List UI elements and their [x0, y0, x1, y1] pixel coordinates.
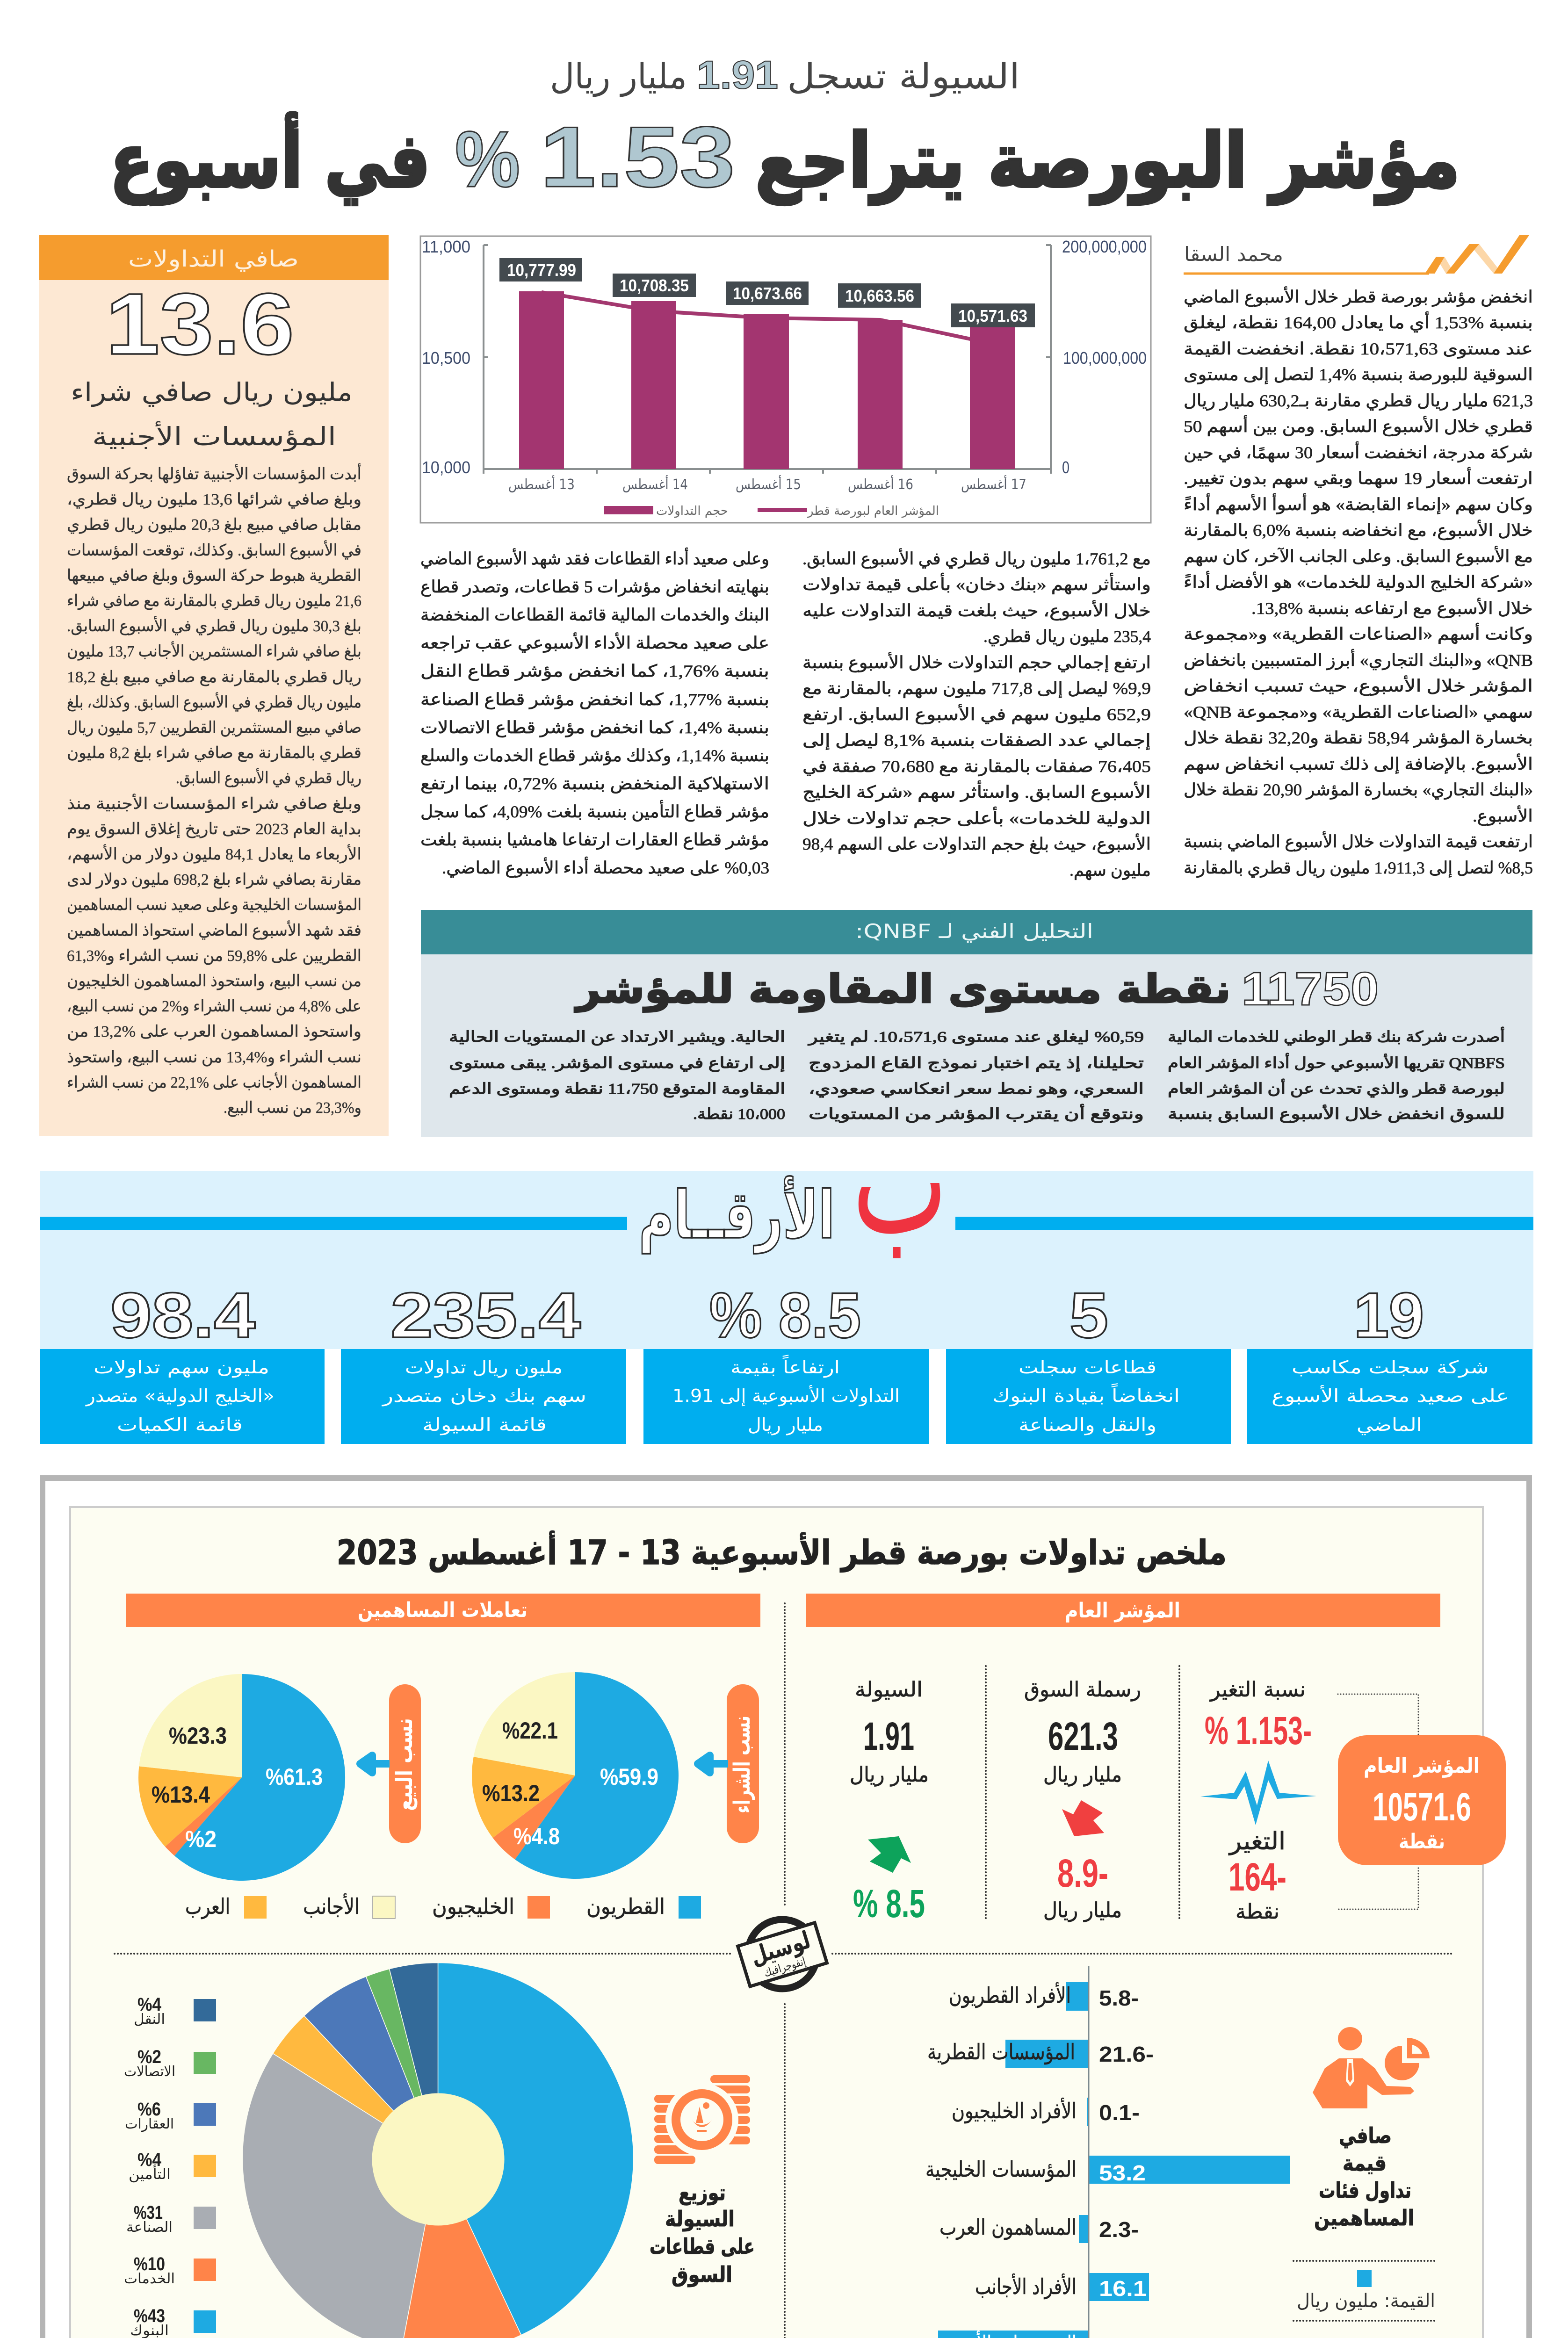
donut legend: %6: [137, 2099, 161, 2120]
stamp: Lusail infographic: لوسيل: [747, 1926, 814, 1970]
data labels: [499, 258, 1035, 327]
text column: right: وكانت أسهم «الصناعات القطرية» و«مجموعة: [1184, 623, 1533, 644]
bar chart caption: المساهمين: [1314, 2205, 1414, 2230]
stat: 98.4: 98.4: [110, 1280, 255, 1351]
stat: 8.5%: ارتفاعاً بقيمة: [730, 1355, 840, 1378]
text column: right: الأسبوع.: [1473, 805, 1533, 826]
bar row values: [1099, 1986, 1154, 2338]
panel subheading: مليون ريال صافي شراء: [71, 377, 353, 407]
stat: liquidity: مليار ريال: [850, 1763, 929, 1787]
bar row values: 16.1: [1099, 2276, 1147, 2301]
analysis column 1: للسوق انخفض خلال الأسبوع السابق بنسبة: [1168, 1104, 1505, 1123]
donut legend: الخدمات: [124, 2271, 175, 2287]
panel body text: مقابل صافي مبيع بلغ 20,3 مليون ريال قطري: [67, 516, 361, 534]
analysis column 3: إلى ارتفاع في مستوى المؤشر. يبقى مستوى: [449, 1054, 785, 1072]
text column: right: 621,3 مليار ريال قطري مقارنة بـ630,2 مليار ريال: [1184, 391, 1533, 411]
pie: buy ratios: %13.2: [482, 1780, 540, 1806]
stat: 19: [1247, 1280, 1532, 1444]
stat: 8.5%: [643, 1280, 929, 1444]
subtitle: السيولة تسجل: [787, 56, 1020, 97]
panel body text: فقد شهد الأسبوع الماضي استحواذ المساهمين: [67, 920, 361, 940]
stat: market cap: مليار ريال: [1043, 1898, 1122, 1922]
date labels: 15 أغسطس: [736, 475, 801, 493]
pie legend: القطريون: [586, 1894, 665, 1919]
panel body text: و%23,3 من نسب البيع.: [224, 1099, 361, 1117]
text column: middle: إجمالي عدد الصفقات بنسبة %8,1 ليصل إلى: [802, 731, 1151, 750]
icon: zigzag: [1425, 235, 1529, 274]
panel body text: وبلغ صافي شراء المؤسسات الأجنبية منذ: [67, 794, 361, 813]
panel: QNBF technical analysis: [421, 910, 1532, 1137]
text column: left: بنسبة %1,77، كما انخفض مؤشر قطاع الصناعة: [420, 690, 769, 709]
stat: change: -1.153 %: [1205, 1709, 1312, 1753]
panel body text: قطري بالمقارنة مع صافي شراء بلغ 8,2 مليون: [67, 744, 361, 762]
analysis column 1: QNBFS تقريها الأسبوعي حول أداء المؤشر العام: [1168, 1053, 1505, 1072]
donut legend: الاتصالات: [124, 2064, 175, 2080]
stat: 19: 19: [1354, 1280, 1424, 1351]
text column: left: بنسبة %1,76، كما انخفض مؤشر قطاع النقل: [420, 662, 769, 681]
analysis heading: 11750: [1242, 963, 1379, 1015]
panel: net trading: [39, 235, 389, 1136]
left axis labels: 10,500: [422, 348, 470, 368]
analysis column 2: %0,59 ليغلق عند مستوى 10،571,6. لم يتغير: [807, 1028, 1144, 1046]
author byline: محمد السقا: [1184, 243, 1283, 266]
stat: 19: شركة سجلت مكاسب: [1292, 1357, 1489, 1378]
stat: 235.4: قائمة السيولة: [422, 1414, 547, 1436]
text column: middle: مليون سهم.: [1069, 861, 1151, 880]
stat: 5: قطاعات سجلت: [1019, 1357, 1156, 1378]
stat: 19: على صعيد محصلة الأسبوع: [1272, 1385, 1509, 1407]
general index callout: المؤشر العام: [1364, 1754, 1480, 1778]
text column: left: بنسبة %1,4، كما انخفض مؤشر قطاع الاتصالات: [420, 718, 769, 737]
bar row values: -2.3: [1099, 2217, 1139, 2242]
text column: middle: واستأثر سهم «بنك دخان» بأعلى قيمة تداولات: [802, 573, 1151, 594]
big number 13.6: 13.6: [106, 276, 294, 373]
text column: right: بنسبة %1,53 أي ما يعادل 164,00 نقطة، ليغلق: [1184, 311, 1533, 332]
icon: up arrow: [868, 1836, 911, 1873]
left axis labels: 10,000: [422, 458, 470, 477]
stat: 8.5%: مليار ريال: [748, 1414, 823, 1435]
stat: change: [1200, 1678, 1316, 1924]
right axis labels: 0: [1062, 458, 1069, 477]
panel body text: نسب الشراء و%13,4 من نسب البيع، واستحوذ: [67, 1049, 361, 1067]
donut caption: على قطاعات: [650, 2234, 755, 2259]
stat: 5: انخفاضاً بقيادة البنوك: [992, 1383, 1180, 1407]
text column: middle: [802, 548, 1151, 880]
general index callout: 10571.6: [1373, 1785, 1471, 1829]
text column: middle: الدولية للخدمات» بأعلى حجم تداولات خلال: [802, 807, 1151, 828]
panel body text: على %4,8 من نسب الشراء و%2 من نسب البيع،: [67, 998, 361, 1016]
donut caption: [650, 2180, 755, 2287]
panel subheading: [71, 377, 353, 451]
stat: 8.5%: التداولات الأسبوعية إلى 1.91: [672, 1385, 900, 1407]
donut chart: liquidity by sector: [243, 1963, 633, 2338]
panel body text: القطريين على %59,8 من نسب الشراء و%61,3: [67, 947, 361, 965]
bars: [519, 291, 1015, 469]
stat: change: التغير: [1228, 1827, 1286, 1855]
donut legend: %4: [137, 1994, 162, 2015]
text column: middle: 652,9 مليون سهم في الأسبوع السابق. ارتفع: [802, 704, 1151, 724]
panel body text: القطرية هبوط حركة السوق وبلغ صافي مبيعها: [67, 567, 361, 585]
analysis column 3: المقاومة المتوقع 11،750 نقطة ومستوى الدعم: [449, 1080, 785, 1097]
text column: middle: مع 1،761,2 مليون ريال قطري في الأسبوع السابق.: [802, 548, 1151, 569]
pie: buy ratios: %4.8: [513, 1823, 560, 1849]
pie legend: العرب: [185, 1894, 230, 1919]
section header: shareholder dealings: تعاملات المساهمين: [358, 1598, 527, 1622]
donut caption: السوق: [672, 2262, 732, 2287]
stat: 235.4: [341, 1280, 626, 1444]
panel body text: أبدت المؤسسات الأجنبية تفاؤلها بحركة السوق: [67, 463, 361, 483]
stat: market cap: 621.3: [1048, 1714, 1118, 1758]
bar chart caption: قيمة: [1343, 2150, 1387, 2176]
panel header: صافي التداولات: [128, 246, 299, 272]
icon: down arrow: [1062, 1800, 1104, 1836]
text column: left: البنك والخدمات المالية قائمة القطاعات المنخفضة: [420, 606, 769, 625]
stat: 235.4: سهم بنك دخان متصدر: [381, 1385, 586, 1407]
line series: [542, 292, 992, 344]
donut legend: [124, 1994, 216, 2338]
subtitle: مليار ريال: [550, 56, 687, 97]
main title: [110, 108, 1460, 205]
donut legend: %31: [134, 2202, 163, 2223]
right axis labels: 200,000,000: [1062, 237, 1147, 256]
general index callout: [1338, 1735, 1506, 1865]
section header: general index: المؤشر العام: [1065, 1599, 1180, 1623]
panel body text: مقارنة بصافي شراء بلغ 698,2 مليون دولار لدى: [67, 871, 361, 889]
text column: middle: 76،405 صفقات بالمقارنة مع 70،680 صفقة في: [802, 757, 1151, 776]
text column: right: السوقية للبورصة بنسبة %1,4 لتصل إلى مستوى: [1184, 365, 1533, 384]
panel body text: المساهمون الأجانب على %22,1 من نسب الشراء: [67, 1072, 361, 1092]
panel: weekly summary frame: [43, 1478, 1529, 2338]
stat: 98.4: «الخليج الدولية» متصدر: [85, 1385, 275, 1407]
panel body text: ريال قطري في الأسبوع السابق.: [176, 768, 361, 787]
icon: coins with emblem: [654, 2075, 750, 2164]
text column: left: مؤشر قطاع العقارات ارتفاعا هامشيا بنسبة بلغت: [420, 830, 769, 850]
bar row values: -0.1: [1099, 2100, 1140, 2125]
data labels: 10,571.63: [958, 306, 1027, 325]
analysis column 1: [1168, 1027, 1505, 1123]
left axis labels: [422, 237, 470, 477]
text column: left: بنسبة %1,14، وكذلك مؤشر قطاع الخدمات والسلع: [420, 746, 769, 765]
pill: sell ratios label: نسب البيع: [391, 1718, 418, 1811]
panel body text: المؤسسات الخليجية وعلى صعيد نسب المساهمين: [67, 896, 361, 914]
bar row labels: المساهمون العرب: [939, 2215, 1077, 2240]
text column: right: «البنك التجاري» بخسارة المؤشر 20,90 نقطة خلال: [1184, 780, 1533, 800]
panel body text: ريال قطري بالمقارنة مع صافي مبيع بلغ 18,2: [67, 669, 361, 686]
summary title: ملخص تداولات بورصة قطر الأسبوعية 13 - 17 أغسطس 2023: [337, 1530, 1227, 1573]
stat: market cap: رسملة السوق: [1024, 1678, 1141, 1702]
section header: general index: [806, 1594, 1440, 1627]
panel body text: 21,6 مليون ريال قطري بالمقارنة مع صافي شراء: [67, 592, 361, 610]
pill: sell ratios label: [389, 1684, 421, 1843]
panel body text: في الأسبوع السابق. وكذلك، توقعت المؤسسات: [67, 540, 361, 560]
date labels: 14 أغسطس: [622, 475, 688, 493]
text column: right: بخسارة المؤشر 58,94 نقطة و32,20 نقطة خلال: [1184, 729, 1533, 748]
icon: businessman with pie chart: [1313, 2027, 1430, 2108]
panel body text: واستحوذ المساهمون العرب على %13,2 من: [67, 1023, 361, 1041]
analysis column 2: تحليلنا، إذ يتم اختبار نموذج القاع المزدوج: [809, 1054, 1144, 1072]
subtitle: [550, 53, 1020, 97]
left axis labels: 11,000: [422, 237, 470, 256]
data labels: 10,708.35: [620, 276, 689, 295]
pie: sell ratios: %61.3: [266, 1764, 323, 1790]
date labels: 13 أغسطس: [508, 475, 575, 493]
text column: right: الأسبوع. بالإضافة إلى ذلك تسبب انخفاض سهم: [1184, 753, 1533, 774]
text column: middle: ارتفع إجمالي حجم التداولات خلال الأسبوع بنسبة: [802, 652, 1151, 672]
text column: right: انخفض مؤشر بورصة قطر خلال الأسبوع الماضي: [1184, 286, 1533, 307]
panel body text: [67, 463, 361, 1117]
analysis column 1: لبورصة قطر والذي تحدث عن أن المؤشر العام: [1168, 1079, 1505, 1097]
bar chart caption: صافي: [1339, 2123, 1392, 2148]
panel body text: بداية العام 2023 حتى تاريخ إغلاق السوق يوم: [67, 821, 361, 838]
analysis header: التحليل الفني لـ QNBF:: [855, 920, 1093, 943]
panel body text: من نسب البيع، واستحوذ المساهمون الخليجيون: [67, 973, 361, 990]
text column: right: عند مستوى 10،571,63 نقطة. انخفضت القيمة: [1184, 339, 1533, 359]
chart legend: [604, 504, 939, 518]
text column: left: على صعيد محصلة الأداء الأسبوعي عقب تراجعه: [420, 632, 769, 653]
pie: buy ratios: [472, 1672, 679, 1879]
bar row labels: [925, 1982, 1077, 2338]
author byline: [1184, 235, 1529, 274]
subtitle: 1.91: [697, 53, 778, 97]
text column: right: مع الأسبوع السابق. وعلى الجانب الآخر، كان سهم: [1184, 546, 1533, 566]
panel header: [39, 235, 389, 280]
pie: sell ratios: %13.4: [152, 1782, 210, 1808]
numbers heading: [639, 1093, 948, 1268]
stat: market cap: [1024, 1678, 1141, 1922]
pill: buy ratios label: نسب الشراء: [729, 1716, 755, 1813]
analysis column 2: السعري، وهو نمط سعر انعكاسي صعودي،: [809, 1080, 1144, 1097]
arrow: sell: [360, 1755, 390, 1773]
data labels: 10,673.66: [733, 284, 802, 303]
stat: 8.5%: % 8.5: [709, 1280, 861, 1351]
bar row labels: المؤسسات القطرية: [927, 2039, 1075, 2065]
bar row labels: الأفراد الخليجيون: [952, 2097, 1077, 2124]
panel body text: وبلغ صافي شرائها 13,6 مليون ريال قطري،: [67, 491, 361, 509]
text column: left: وعلى صعيد أداء القطاعات فقد شهد الأسبوع الماضي: [420, 548, 769, 569]
stat: 235.4: مليون ريال تداولات: [405, 1357, 563, 1378]
analysis column 1: أصدرت شركة بنك قطر الوطني للخدمات المالية: [1168, 1027, 1505, 1046]
bar row labels: المؤسسات الخليجية: [925, 2157, 1077, 2182]
donut legend: الصناعة: [126, 2219, 173, 2236]
donut legend: العقارات: [125, 2116, 174, 2132]
analysis heading: [574, 963, 1379, 1015]
text column: right: ارتفعت أسعار 19 سهما وبقي سهم بدون تغيير.: [1184, 467, 1533, 488]
text column: middle: %9,9 ليصل إلى 717,8 مليون سهم، بالمقارنة مع: [802, 679, 1151, 698]
panel body text: بلغ 30,3 مليون ريال قطري في الأسبوع السابق.: [67, 616, 361, 635]
panel subheading: المؤسسات الأجنبية: [92, 421, 336, 451]
panel: by the numbers: [40, 1093, 1533, 1444]
stat: market cap: مليار ريال: [1043, 1763, 1122, 1787]
date labels: 16 أغسطس: [848, 475, 913, 493]
text column: left: الاستهلاكية المنخفض بنسبة %0,72، بينما ارتفع: [420, 774, 769, 794]
bar row values: -21.6: [1099, 2042, 1154, 2066]
date labels: 17 أغسطس: [961, 475, 1026, 493]
pie legend: الأجانب: [303, 1893, 360, 1919]
text column: middle: خلال الأسبوع، حيث بلغت قيمة التداولات عليه: [802, 600, 1151, 621]
right axis labels: [1062, 237, 1147, 477]
pill: buy ratios label: [727, 1684, 759, 1843]
main title: مؤشر البورصة يتراجع: [755, 117, 1460, 205]
donut legend: %10: [134, 2254, 165, 2274]
analysis heading: نقطة مستوى المقاومة للمؤشر: [574, 966, 1231, 1012]
text column: right: خلال الأسبوع مع ارتفاعه بنسبة %13,8.: [1251, 598, 1533, 618]
analysis column 2: [807, 1028, 1144, 1123]
text column: left: مؤشر قطاع التأمين بنسبة بلغت %4,09، كما سجل: [420, 800, 769, 822]
main title: في أسبوع: [110, 112, 430, 205]
bar row values: 53.2: [1099, 2161, 1146, 2185]
stat: 5: والنقل والصناعة: [1019, 1414, 1156, 1436]
stat: change: نقطة: [1236, 1900, 1279, 1924]
right axis labels: 100,000,000: [1063, 348, 1147, 368]
chart legend: حجم التداولات: [656, 504, 728, 518]
text column: right: %8,5 لتصل إلى 1،911,3 مليون ريال قطري بالمقارنة: [1184, 859, 1533, 878]
analysis header: [421, 910, 1532, 954]
stat: 5: [946, 1280, 1231, 1444]
numbers heading: الأرقــام: [639, 1176, 835, 1254]
text column: right: قطري خلال الأسبوع السابق. ومن بين أسهم 50: [1184, 415, 1533, 436]
text column: right: سهمي «الصناعات القطرية» و«مجموعة QNB»: [1184, 703, 1533, 722]
data labels: 10,777.99: [507, 260, 576, 280]
text column: middle: الأسبوع، حيث بلغ حجم التداولات على السهم 98,4: [802, 833, 1151, 854]
donut caption: السيولة: [665, 2206, 735, 2231]
stat: 235.4: 235.4: [390, 1280, 581, 1351]
stat: change: نسبة التغير: [1209, 1678, 1306, 1702]
stat: liquidity: [850, 1678, 929, 1926]
pie legend: [185, 1893, 701, 1919]
panel body text: الأربعاء ما يعادل 84,1 مليون دولار من الأسهم،: [67, 844, 361, 864]
donut legend: النقل: [134, 2011, 165, 2028]
text column: left: %0,03 على صعيد محصلة أداء الأسبوع الماضي.: [442, 857, 769, 878]
text column: left: بنهايته انخفاض مؤشرات 5 قطاعات، وتصدر قطاع: [420, 577, 769, 597]
stamp: Lusail infographic: [738, 1919, 827, 1989]
stat: 98.4: قائمة الكميات: [117, 1414, 243, 1435]
text column: right: المؤشر خلال الأسبوع، حيث تسبب انخفاض: [1184, 675, 1533, 696]
analysis column 3: 10،000 نقطة.: [693, 1105, 785, 1122]
pie: sell ratios: [138, 1674, 345, 1881]
pie: buy ratios: %59.9: [600, 1764, 658, 1790]
panel body text: بلغ صافي شراء المستثمرين الأجانب 13,7 مليون: [67, 641, 361, 661]
stat: market cap: -8.9: [1057, 1851, 1108, 1895]
analysis column 3: [449, 1028, 785, 1122]
stat: liquidity: 1.91: [863, 1714, 914, 1758]
text column: left: [420, 548, 769, 878]
bar chart: net trading by investor category: [925, 1966, 1290, 2338]
numbers heading: ب: [852, 1093, 948, 1268]
stat: liquidity: 8.5 %: [853, 1882, 925, 1926]
chart: index and trading volume: [420, 236, 1151, 523]
text column: right: شركة مدرجة، انخفضت أسعار 30 سهمًا، في حين: [1184, 441, 1533, 462]
donut legend: %2: [137, 2047, 161, 2067]
main title: %: [455, 115, 520, 204]
arrow: buy: [698, 1755, 728, 1773]
stat: change: -164: [1228, 1855, 1286, 1899]
data labels: 10,663.56: [845, 286, 914, 305]
donut legend: التأمين: [129, 2164, 171, 2183]
stat: 5: 5: [1069, 1280, 1108, 1351]
pie legend: الخليجيون: [432, 1894, 514, 1919]
main title: 1.53: [540, 108, 735, 205]
text column: right: ارتفعت قيمة التداولات خلال الأسبوع الماضي بنسبة: [1184, 831, 1533, 851]
text column: right: «شركة الخليج الدولية للخدمات» هو الأفضل أداءً: [1184, 571, 1533, 592]
donut caption: توزيع: [679, 2180, 726, 2205]
bar chart caption: تداول فئات: [1319, 2178, 1411, 2203]
panel body text: مليون ريال قطري في الأسبوع السابق. وكذلك، بلغ: [67, 692, 361, 712]
stat: 98.4: [40, 1280, 325, 1444]
pie: sell ratios: %2: [185, 1826, 217, 1852]
bar row values: -5.8: [1099, 1986, 1139, 2010]
stat: 98.4: مليون سهم تداولات: [94, 1357, 269, 1378]
panel body text: صافي مبيع المستثمرين القطريين 5,7 مليون ريال: [67, 719, 361, 737]
stat: 19: الماضي: [1357, 1414, 1422, 1435]
text column: right: وكان سهم «إنماء القابضة» هو أسوأ الأسهم أداءً: [1184, 493, 1533, 514]
section header: shareholder dealings: [126, 1594, 760, 1627]
text column: right: [1184, 286, 1533, 878]
bar chart legend: القيمة: مليون ريال: [1297, 2290, 1435, 2312]
stamp: Lusail infographic: إنفوجرافيك: [762, 1955, 807, 1980]
date labels: [508, 475, 1026, 493]
analysis column 3: الحالية. ويشير الارتداد عن المستويات الحالية: [449, 1028, 785, 1046]
bar row labels: الأفراد الأجانب: [975, 2273, 1077, 2300]
analysis column 2: ونتوقع أن يقترب المؤشر من المستويات: [809, 1104, 1144, 1123]
pie: sell ratios: %23.3: [169, 1723, 227, 1749]
text column: right: QNB» و«البنك التجاري» أبرز المتسببين بانخفاض: [1184, 649, 1533, 670]
text column: middle: 235,4 مليون ريال قطري.: [983, 627, 1151, 646]
stat: liquidity: السيولة: [855, 1678, 923, 1702]
pie: buy ratios: %22.1: [502, 1717, 558, 1744]
icon: pulse: [1200, 1761, 1316, 1825]
chart legend: المؤشر العام لبورصة قطر: [807, 504, 939, 518]
text column: right: خلال الأسبوع، مع انخفاضه بنسبة %6,0 بالمقارنة: [1184, 520, 1533, 540]
donut legend: %4: [137, 2150, 162, 2170]
bar chart caption: [1314, 2123, 1414, 2230]
general index callout: نقطة: [1399, 1830, 1445, 1854]
donut legend: %43: [134, 2306, 165, 2326]
bar row labels: الأفراد القطريون: [949, 1982, 1071, 2008]
bar chart legend: [1297, 2270, 1435, 2312]
text column: middle: الأسبوع السابق. واستأثر سهم «شركة الخليج: [802, 780, 1151, 802]
